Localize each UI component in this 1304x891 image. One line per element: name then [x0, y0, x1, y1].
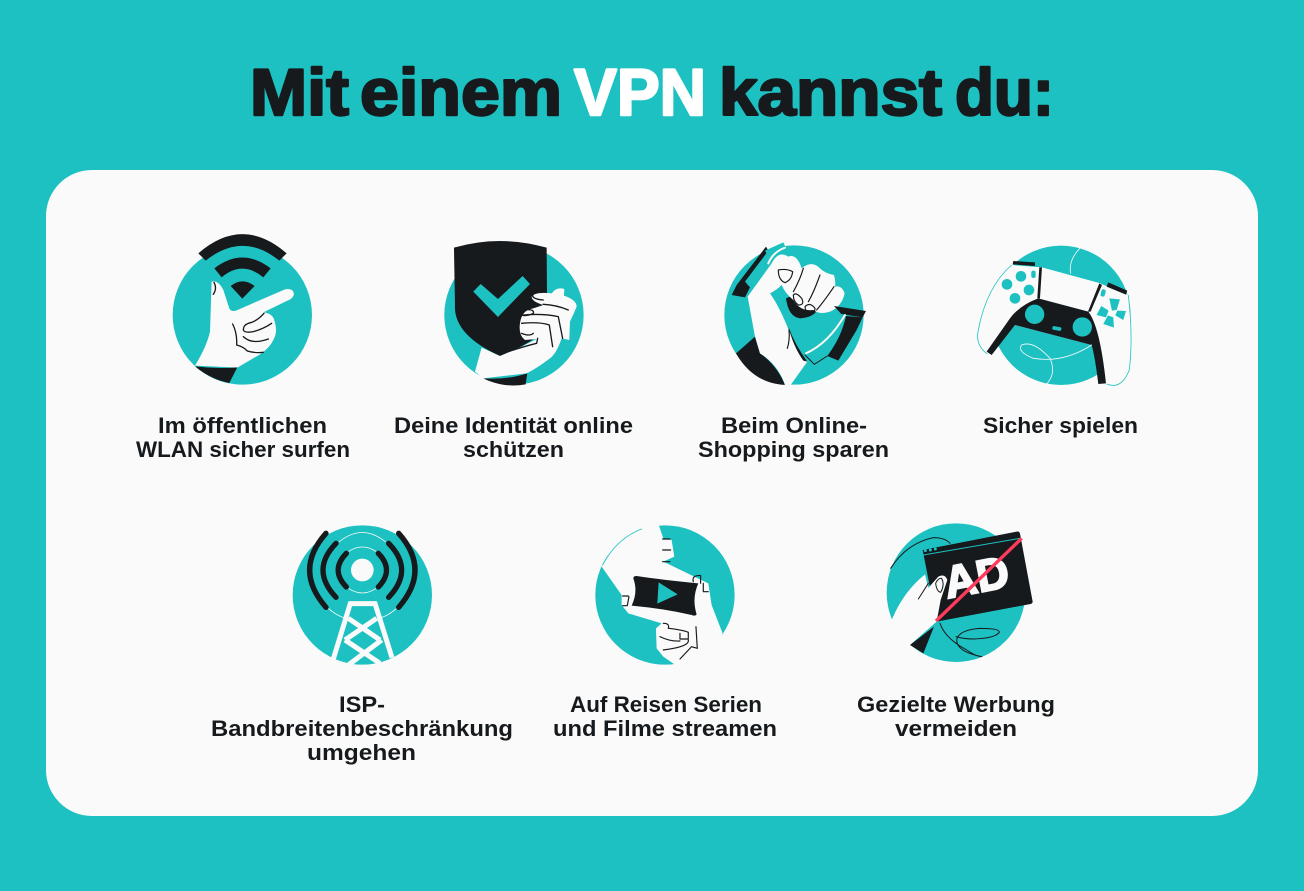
label: shopping: Shopping sparen [698, 437, 889, 462]
label: targeted ads: vermeiden [895, 716, 1017, 741]
label: streaming [553, 692, 777, 741]
label: shopping [698, 413, 889, 462]
title: du: [955, 55, 1054, 129]
title: kannst [719, 55, 942, 129]
label: public wifi: Im öffentlichen [158, 413, 327, 438]
icon: blocked ad [887, 523, 1033, 662]
label: shopping: Beim Online- [721, 413, 867, 438]
label: streaming: und Filme streamen [553, 716, 777, 741]
title: Mit [250, 55, 349, 129]
label: identity: schützen [463, 437, 564, 462]
icon: game controller [978, 246, 1131, 385]
panel: white card [46, 170, 1258, 816]
label: streaming: Auf Reisen Serien [570, 692, 762, 717]
label: identity: Deine Identität online [394, 413, 633, 438]
icon: blocked ad: AD [940, 546, 1013, 608]
title [250, 55, 1054, 129]
label: gaming: Sicher spielen [983, 413, 1138, 438]
label: public wifi [136, 413, 350, 462]
label: public wifi: WLAN sicher surfen [136, 437, 350, 462]
label: ISP throttling: umgehen [307, 740, 416, 765]
icon: wifi hand [173, 234, 312, 385]
label: targeted ads: Gezielte Werbung [857, 692, 1055, 717]
title: VPN [574, 55, 706, 129]
label: ISP throttling [211, 692, 513, 765]
label: ISP throttling: Bandbreitenbeschränkung [211, 716, 513, 741]
icon: hands framing video [595, 524, 735, 667]
label: ISP throttling: ISP- [339, 692, 385, 717]
icon: radio tower [293, 525, 432, 665]
title: einem [360, 55, 562, 129]
label: identity [394, 413, 633, 462]
icon: fist with credit card [724, 242, 866, 385]
icon: shield hand [444, 241, 584, 385]
label: targeted ads [857, 692, 1055, 741]
